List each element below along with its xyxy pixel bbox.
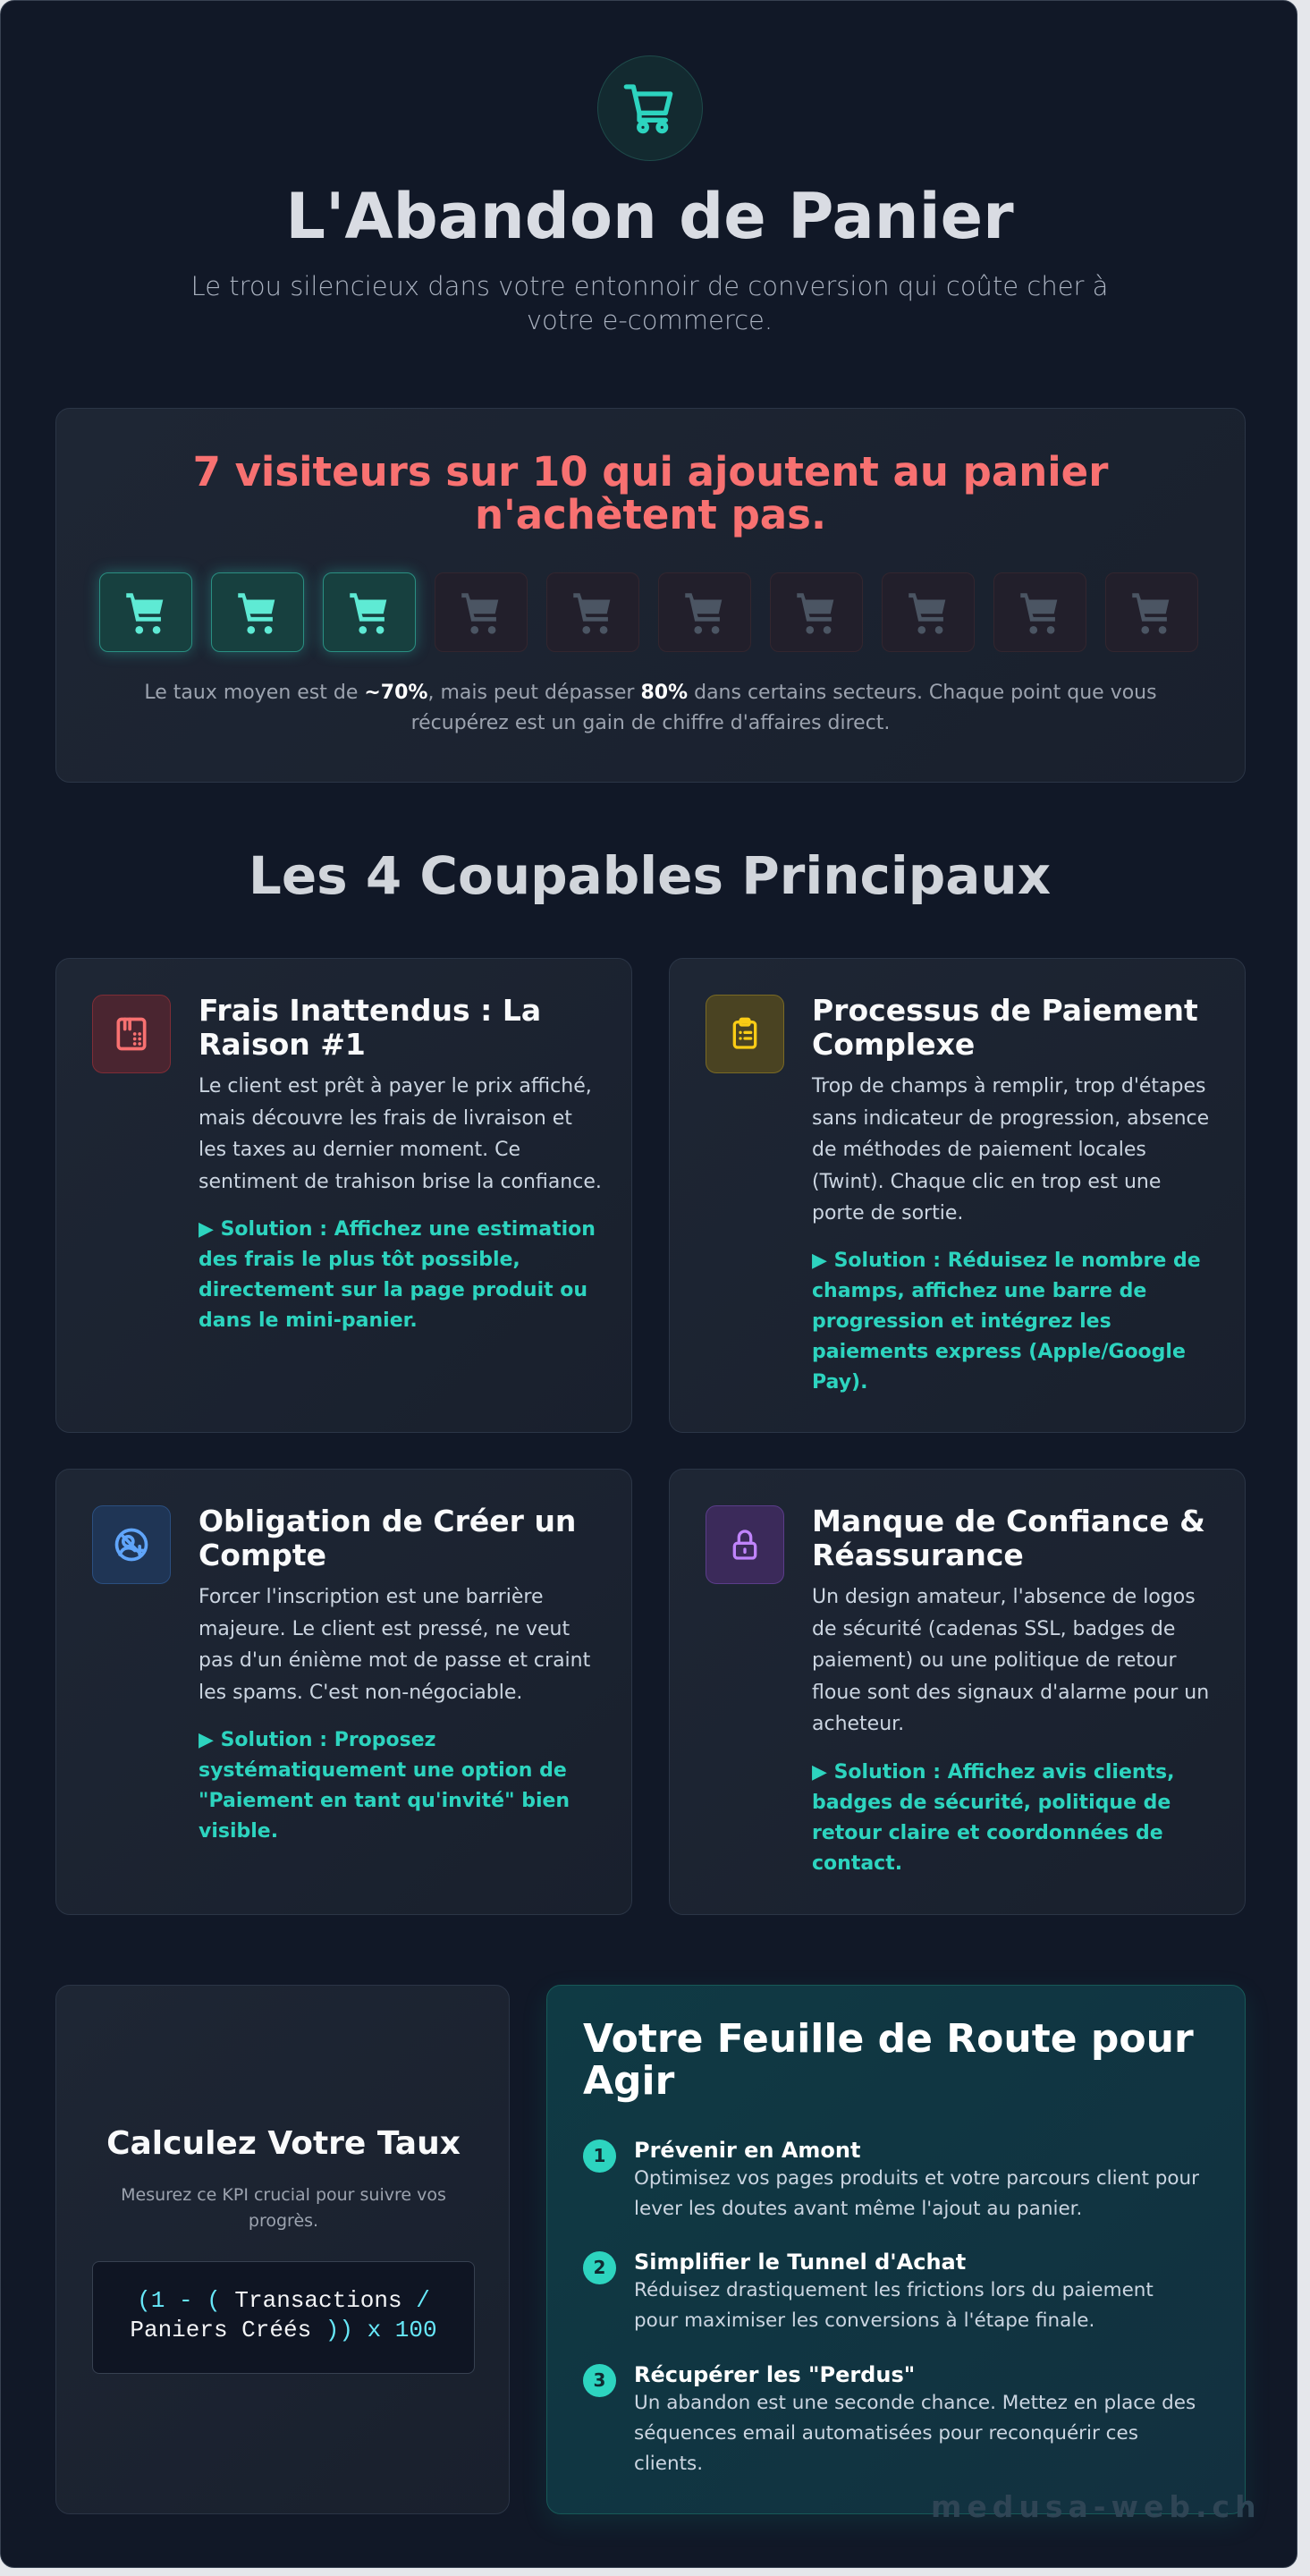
calc subtitle xyxy=(121,2185,446,2231)
roadmap title: Votre Feuille de Route pour xyxy=(583,2016,1194,2062)
solution: ▶ Solution : Affichez une estimation xyxy=(199,1218,596,1241)
formula box: Paniers Créés )) x 100 xyxy=(130,2317,437,2343)
card title: Obligation de Créer un xyxy=(199,1504,576,1538)
watermark: medusa-web.ch xyxy=(931,2489,1262,2524)
formula box xyxy=(92,2261,475,2374)
solution: directement sur la page produit ou xyxy=(199,1279,587,1301)
card text: sentiment de trahison brise la confiance. xyxy=(199,1171,602,1193)
solution xyxy=(812,1250,1201,1394)
icon: receipt xyxy=(92,995,171,1073)
step 1: lever les doutes avant même l'ajout au panier. xyxy=(634,2198,1082,2220)
step 3 xyxy=(583,2362,1196,2475)
step 3: Un abandon est une seconde chance. Mettez en place des xyxy=(634,2392,1196,2414)
card text: Le client est prêt à payer le prix affiché, xyxy=(199,1075,592,1097)
solution: "Paiement en tant qu'invité" bien xyxy=(199,1790,570,1812)
card text: paiement) ou une politique de retour xyxy=(812,1649,1177,1672)
card title: Compte xyxy=(199,1538,326,1572)
card text: Un design amateur, l'absence de logos xyxy=(812,1586,1196,1608)
card title: Frais Inattendus : La xyxy=(199,993,541,1028)
card text: les taxes au dernier moment. Ce xyxy=(199,1139,520,1161)
panel: statistic xyxy=(55,408,1246,783)
step 1: 1 xyxy=(594,2145,605,2166)
card text: de méthodes de paiement locales xyxy=(812,1139,1146,1161)
solution: des frais le plus tôt possible, xyxy=(199,1249,520,1271)
icon: lock xyxy=(706,1505,784,1584)
solution: paiements express (Apple/Google xyxy=(812,1341,1186,1363)
step 1: Prévenir en Amont xyxy=(634,2138,860,2163)
card text: majeure. Le client est pressé, ne veut xyxy=(199,1618,570,1640)
step 3: 3 xyxy=(594,2369,605,2391)
solution: champs, affichez une barre de xyxy=(812,1280,1146,1302)
card text: acheteur. xyxy=(812,1713,904,1735)
icon: user blocked xyxy=(92,1505,171,1584)
card title: Complexe xyxy=(812,1027,975,1062)
step 1 xyxy=(583,2138,1199,2220)
card text xyxy=(812,1586,1209,1735)
solution: ▶ Solution : Proposez xyxy=(199,1729,435,1751)
card text: sans indicateur de progression, absence xyxy=(812,1107,1209,1130)
card text xyxy=(199,1586,590,1704)
card title xyxy=(199,1504,576,1572)
step 2: pour maximiser les conversions à l'étape finale. xyxy=(634,2309,1094,2332)
step 2: Réduisez drastiquement les frictions lors du paiement xyxy=(634,2279,1154,2301)
stat caption: Le taux moyen est de ~70%, mais peut dépasser 80% dans certains secteurs. Chaque point que vous xyxy=(144,682,1157,704)
panel: card compte xyxy=(55,1469,632,1915)
card title: Réassurance xyxy=(812,1538,1024,1572)
calc subtitle: Mesurez ce KPI crucial pour suivre vos xyxy=(121,2185,446,2205)
solution: systématiquement une option de xyxy=(199,1759,567,1782)
icon: clipboard xyxy=(706,995,784,1073)
card text: mais découvre les frais de livraison et xyxy=(199,1107,572,1130)
panel: card frais xyxy=(55,958,632,1433)
headline stat xyxy=(193,448,1109,538)
panel: calculator xyxy=(55,1985,510,2514)
title: L'Abandon de Panier xyxy=(285,180,1014,253)
panel: card confiance xyxy=(669,1469,1246,1915)
roadmap title xyxy=(583,2016,1194,2104)
solution xyxy=(812,1761,1175,1875)
card title xyxy=(812,993,1198,1062)
subtitle: votre e-commerce. xyxy=(527,305,773,335)
solution: ▶ Solution : Affichez avis clients, xyxy=(812,1761,1175,1784)
formula box: (1 - ( Transactions / xyxy=(137,2287,430,2314)
card text xyxy=(199,1075,602,1193)
card title: Processus de Paiement xyxy=(812,993,1198,1028)
solution: contact. xyxy=(812,1852,902,1875)
solution: visible. xyxy=(199,1820,278,1843)
step 2: 2 xyxy=(594,2257,605,2278)
panel: roadmap xyxy=(546,1985,1246,2514)
card text xyxy=(812,1075,1209,1224)
solution: Pay). xyxy=(812,1371,867,1394)
cart row xyxy=(92,565,1198,659)
calc title: Calculez Votre Taux xyxy=(106,2125,461,2162)
calc subtitle: progrès. xyxy=(249,2211,318,2231)
solution: dans le mini-panier. xyxy=(199,1309,418,1332)
subtitle xyxy=(191,271,1108,335)
icon: header cart xyxy=(597,55,703,161)
solution: progression et intégrez les xyxy=(812,1310,1111,1333)
solution xyxy=(199,1218,596,1332)
card text: de sécurité (cadenas SSL, badges de xyxy=(812,1618,1175,1640)
step 2 xyxy=(583,2250,1154,2332)
step 3: Récupérer les "Perdus" xyxy=(634,2362,915,2387)
headline stat: n'achètent pas. xyxy=(475,491,826,538)
subtitle: Le trou silencieux dans votre entonnoir de conversion qui coûte cher à xyxy=(191,271,1108,301)
solution: badges de sécurité, politique de xyxy=(812,1792,1171,1814)
card title xyxy=(812,1504,1205,1572)
step 3: séquences email automatisées pour reconquérir ces xyxy=(634,2422,1138,2445)
card text: les spams. C'est non-négociable. xyxy=(199,1682,522,1704)
panel: card paiement xyxy=(669,958,1246,1433)
card text: pas d'un énième mot de passe et craint xyxy=(199,1649,590,1672)
stat caption: récupérez est un gain de chiffre d'affaires direct. xyxy=(411,712,890,734)
solution xyxy=(199,1729,570,1843)
stat caption xyxy=(144,682,1157,734)
section heading: Les 4 Coupables Principaux xyxy=(249,845,1051,906)
step 3: clients. xyxy=(634,2453,703,2475)
card text: (Twint). Chaque clic en trop est une xyxy=(812,1171,1161,1193)
headline stat: 7 visiteurs sur 10 qui ajoutent au panier xyxy=(193,448,1108,496)
card title xyxy=(199,993,541,1062)
step 2: Simplifier le Tunnel d'Achat xyxy=(634,2250,966,2275)
solution: retour claire et coordonnées de xyxy=(812,1822,1163,1844)
solution: ▶ Solution : Réduisez le nombre de xyxy=(812,1250,1201,1272)
card text: Forcer l'inscription est une barrière xyxy=(199,1586,544,1608)
card text: floue sont des signaux d'alarme pour un xyxy=(812,1682,1209,1704)
card text: Trop de champs à remplir, trop d'étapes xyxy=(812,1075,1205,1097)
step 1: Optimisez vos pages produits et votre parcours client pour xyxy=(634,2167,1199,2190)
roadmap title: Agir xyxy=(583,2058,674,2104)
card title: Raison #1 xyxy=(199,1027,366,1062)
card text: porte de sortie. xyxy=(812,1202,963,1224)
card title: Manque de Confiance & xyxy=(812,1504,1205,1538)
